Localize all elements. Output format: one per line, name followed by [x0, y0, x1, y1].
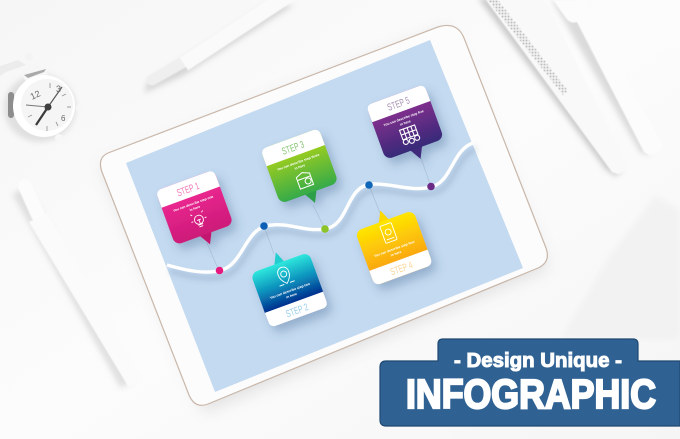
card: step 3: [260, 128, 342, 214]
alarm clock: 6: [61, 114, 66, 123]
card: step 5: [366, 84, 448, 170]
tablet screen: [126, 40, 523, 392]
card: step 2: in here: [286, 292, 298, 299]
translucent object: bottom right: [560, 195, 680, 339]
pen: left: [20, 186, 143, 386]
card: step 1: STEP 1: [175, 181, 201, 199]
tablet body: [100, 25, 547, 405]
card: step 3: You can describe step three: [276, 153, 320, 172]
pen: right dotted marker: [478, 0, 628, 176]
card: step 2: STEP 2: [285, 302, 310, 320]
card: step 2: [247, 242, 329, 328]
card: step 4: in here: [390, 250, 402, 257]
card: step 5: in here: [399, 119, 411, 127]
card: step 2: You can describe step two: [269, 282, 311, 300]
icon: gears: [399, 125, 421, 146]
card: step 1: in here: [189, 205, 201, 212]
pen: far right: [552, 0, 663, 156]
wave path: [167, 143, 473, 272]
banner: [380, 339, 680, 426]
icon: gear and box: [295, 170, 314, 189]
card: step 4: You can describe step four: [373, 239, 416, 258]
banner shape: [380, 339, 680, 426]
card: step 3: STEP 3: [280, 139, 306, 158]
connector lines: [207, 158, 431, 271]
icon: document: [380, 222, 397, 243]
alarm clock: 3: [56, 84, 61, 94]
card: step 4: [351, 200, 433, 286]
card: step 5: STEP 5: [386, 95, 412, 114]
card: step 5: You can describe step five: [383, 109, 424, 127]
tablet: [100, 25, 548, 412]
alarm clock: 12: [29, 88, 42, 102]
timeline dots: [216, 181, 435, 274]
pen: top centre: [144, 0, 295, 93]
icon: map pin: [274, 265, 295, 286]
banner subtitle: - Design Unique -: [454, 350, 622, 372]
card: step 1: [155, 170, 237, 256]
alarm clock: [0, 53, 84, 142]
card: step 4: STEP 4: [389, 260, 415, 278]
card: step 1: You can describe step one: [172, 195, 214, 213]
icon: light bulb: [189, 210, 209, 229]
card: step 3: in here: [294, 163, 306, 171]
tablet shadow: [102, 28, 548, 412]
